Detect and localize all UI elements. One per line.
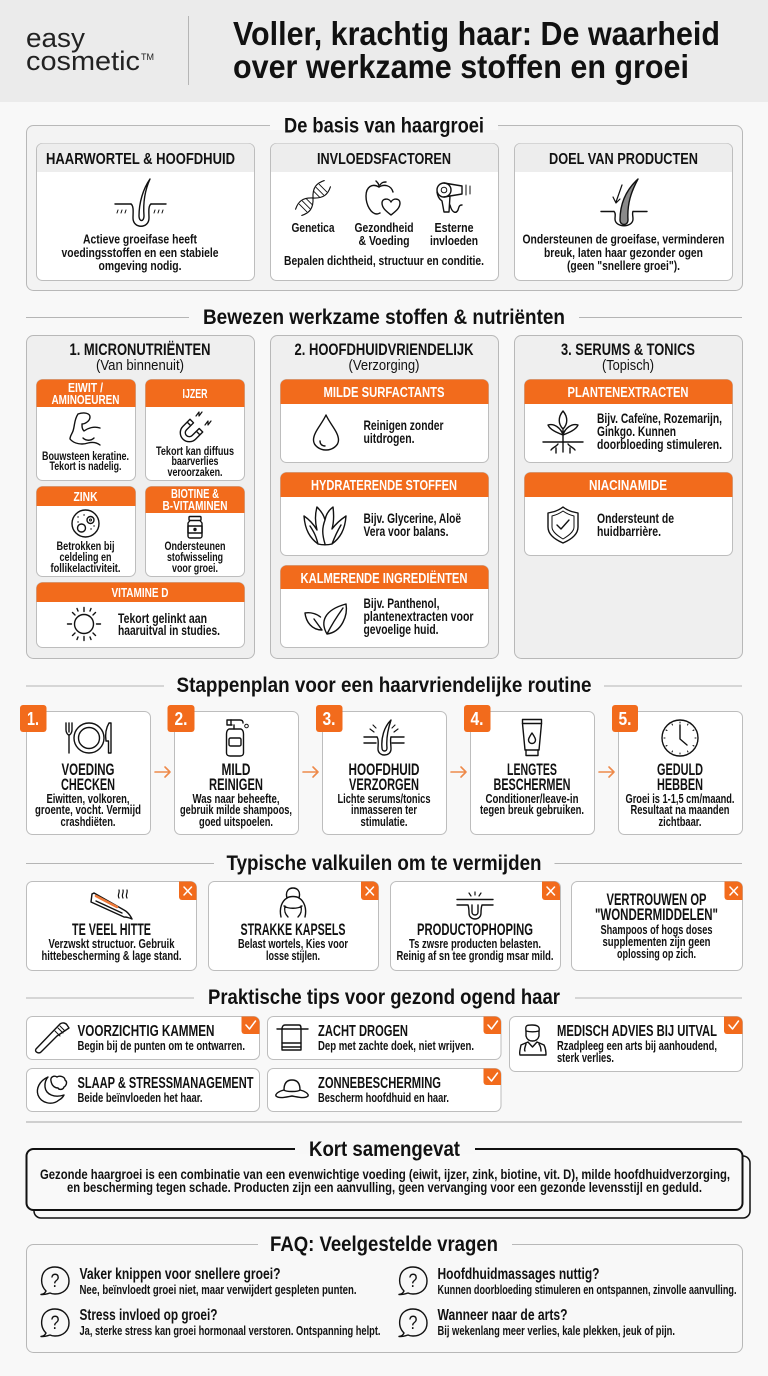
stap 1: voeding checken: 1. (27, 709, 39, 729)
stap 5: geduld hebben: HEBBEN (657, 776, 703, 794)
card: haarwortel en hoofdhuid: HAARWORTEL & HOOFDHUID (46, 151, 235, 168)
heading: stappenplan: Stappenplan voor een haarvriendelijke routine (176, 674, 592, 697)
valkuil: productophoping: PRODUCTOPHOPING (417, 921, 533, 939)
icon: strakke knot (280, 888, 306, 917)
stap 3: hoofdhuid verzorgen: VERZORGEN (349, 776, 419, 794)
valkuil: te veel hitte: hittebescherming & lage stand. (42, 948, 182, 963)
panel: faq (26, 1233, 742, 1352)
icon: potje (188, 516, 202, 538)
valkuil: strakke kapsels: losse stijlen. (266, 948, 320, 963)
valkuil: wondermiddelen: oplossing op zich. (617, 946, 696, 961)
arrow 4 (599, 767, 614, 777)
stap 4: lengtes beschermen: LENGTES (507, 761, 557, 779)
icon: aloe vera (304, 507, 346, 545)
panel: micronutrienten: (Van binnenuit) (96, 358, 184, 374)
faq item: wanneer naar de arts (399, 1307, 675, 1338)
stap 3: hoofdhuid verzorgen: inmasseren ter (351, 802, 417, 817)
icon: haarfollikel (115, 179, 166, 226)
stap 1: voeding checken: VOEDING (62, 761, 114, 779)
stap 2: mild reinigen: 2. (174, 709, 188, 729)
stap 4: lengtes beschermen (464, 705, 594, 834)
card: ijzer: Tekort kan diffuus (156, 444, 234, 458)
card: eiwit: Tekort is nadelig. (50, 459, 122, 473)
stap 4: lengtes beschermen: 4. (470, 709, 484, 729)
card: ijzer: veroorzaken. (168, 465, 222, 479)
card: eiwit: EIWIT / (68, 380, 103, 395)
stap 4: lengtes beschermen: BESCHERMEN (494, 776, 570, 794)
card: kalmerende ingredienten: KALMERENDE INGREDIËNTEN (300, 570, 468, 587)
card: niacinamide: NIACINAMIDE (589, 478, 667, 494)
card: hydraterende stoffen: Vera voor balans. (364, 523, 448, 539)
icon: kam (36, 1023, 69, 1053)
heading: faq: FAQ: Veelgestelde vragen (270, 1233, 498, 1256)
card: biotine: BIOTINE & (171, 486, 219, 501)
icon: tube (522, 720, 542, 756)
icon: zon (68, 608, 100, 640)
card: doel van producten: breuk, laten haar gezonder ogen (544, 245, 703, 260)
card: milde surfactants (280, 380, 488, 462)
card: niacinamide: huidbarrière. (597, 523, 661, 539)
card: biotine: Ondersteunen (164, 539, 226, 553)
card: haarwortel en hoofdhuid (36, 144, 254, 280)
logo (26, 23, 154, 76)
card: invloedsfactoren: Gezondheid (354, 220, 414, 235)
card: zink (36, 486, 136, 576)
card: plantenextracten: PLANTENEXTRACTEN (568, 385, 688, 401)
card: doel van producten: DOEL VAN PRODUCTEN (549, 151, 698, 168)
panel: hoofdhuidvriendelijk: (Verzorging) (348, 358, 420, 374)
panel: serums en tonics (514, 336, 742, 658)
stap 5: geduld hebben: zichtbaar. (658, 814, 702, 829)
valkuil: te veel hitte (26, 882, 196, 970)
card: hydraterende stoffen: HYDRATERENDE STOFFEN (311, 478, 457, 494)
card: biotine: stofwisseling (167, 550, 223, 564)
title (233, 15, 720, 85)
valkuil: strakke kapsels: STRAKKE KAPSELS (240, 921, 346, 939)
card: vitamine d: Tekort gelinkt aan (118, 610, 207, 626)
icon: handdoek (277, 1025, 308, 1050)
card: invloedsfactoren: INVLOEDSFACTOREN (317, 151, 451, 168)
valkuil: te veel hitte: TE VEEL HITTE (72, 921, 151, 939)
arrow 3 (451, 767, 466, 777)
card: milde surfactants: Reinigen zonder (364, 417, 444, 433)
icon: vraagteken (41, 1267, 69, 1295)
valkuil: wondermiddelen: "WONDERMIDDELEN" (595, 906, 718, 924)
card: eiwit: AMINOEUREN (52, 392, 120, 407)
card: invloedsfactoren: Bepalen dichtheid, structuur en conditie. (284, 253, 484, 268)
card: doel van producten: (geen "snellere groei"). (567, 258, 680, 273)
icon: klok (662, 720, 698, 756)
valkuil: productophoping: Reinig af sn tee grondig msar mild. (396, 948, 554, 963)
tip: zonnebescherming: Bescherm hoofdhuid en haar. (318, 1090, 449, 1105)
tip: zonnebescherming (268, 1068, 501, 1112)
icon: maan en wolk (37, 1076, 67, 1103)
card: invloedsfactoren: Genetica (292, 220, 335, 235)
stap 2: mild reinigen: MILD (222, 761, 251, 779)
tip: slaap en stressmanagement: Beide beïnvloeden het haar. (78, 1090, 202, 1105)
faq item: vaker knippen: Nee, beïnvloedt groei niet, maar verwijdert gespleten punten. (80, 1282, 356, 1297)
icon: vraagteken: ? (408, 1271, 418, 1292)
icon: vraagteken (41, 1309, 69, 1337)
card: biotine (146, 486, 244, 576)
stap 5: geduld hebben (612, 705, 742, 834)
card: kalmerende ingredienten: Bijv. Panthenol, (364, 595, 440, 611)
card: invloedsfactoren: invloeden (430, 233, 478, 248)
icon: bladeren (305, 604, 346, 634)
valkuil: wondermiddelen: VERTROUWEN OP (606, 891, 706, 909)
tip: medisch advies: sterk verlies. (557, 1050, 614, 1065)
card: biotine: voor groei. (172, 561, 218, 575)
header band (0, 0, 768, 102)
card: invloedsfactoren (270, 144, 498, 280)
tip: zacht drogen: ZACHT DROGEN (318, 1023, 408, 1040)
tip: zacht drogen: Dep met zachte doek, niet wrijven. (318, 1038, 474, 1053)
panel: kort samengevat (26, 1138, 750, 1218)
tip: zonnebescherming: ZONNEBESCHERMING (318, 1075, 441, 1092)
stap 5: geduld hebben: GEDULD (657, 761, 703, 779)
card: invloedsfactoren: & Voeding (358, 233, 410, 248)
tip: voorzichtig kammen: VOORZICHTIG KAMMEN (78, 1023, 214, 1040)
faq item: vaker knippen (41, 1266, 356, 1297)
icon: bord en bestek (66, 723, 111, 753)
icon: spier (70, 413, 100, 445)
faq item: wanneer naar de arts: Wanneer naar de arts? (438, 1307, 568, 1324)
panel: serums en tonics: 3. SERUMS & TONICS (561, 341, 695, 359)
icon: schild (548, 507, 578, 543)
card: ijzer (146, 380, 244, 480)
card: vitamine d: VITAMINE D (112, 585, 168, 600)
faq item: vaker knippen: Vaker knippen voor snellere groei? (80, 1266, 280, 1283)
panel: micronutrienten (26, 336, 254, 658)
valkuil: strakke kapsels (208, 882, 378, 970)
card: milde surfactants: uitdrogen. (364, 430, 414, 446)
stap 1: voeding checken (20, 705, 150, 834)
card: plantenextracten: Bijv. Cafeïne, Rozemarijn, (597, 410, 722, 426)
stap 3: hoofdhuid verzorgen: HOOFDHUID (348, 761, 420, 779)
icon: verstopte follikel (457, 892, 493, 919)
icon: fohn (437, 183, 470, 212)
icon: vraagteken: ? (50, 1271, 60, 1292)
stap 5: geduld hebben: 5. (618, 709, 632, 729)
icon: vraagteken: ? (408, 1313, 418, 1334)
stap 3: hoofdhuid verzorgen (316, 705, 446, 834)
icon: plant met wortels (543, 411, 583, 453)
icon: pompfles (226, 720, 248, 756)
valkuil: strakke kapsels: Belast wortels, Kies voor (238, 936, 348, 951)
icon: cel (72, 510, 99, 537)
valkuil: wondermiddelen: Shampoos of hogs doses (600, 922, 712, 937)
stap 3: hoofdhuid verzorgen: Lichte serums/tonics (338, 791, 430, 806)
icon: appel en hart (366, 181, 400, 215)
faq item: stress (41, 1307, 380, 1338)
card: hydraterende stoffen (280, 472, 488, 556)
card: eiwit (36, 380, 136, 480)
heading: praktische tips: Praktische tips voor gezond ogend haar (208, 986, 560, 1009)
tip: zacht drogen (268, 1016, 501, 1060)
icon: magneet (177, 412, 211, 445)
tip: medisch advies (510, 1016, 742, 1072)
card: eiwit: Bouwsteen keratine. (42, 449, 129, 463)
valkuil: wondermiddelen (572, 882, 742, 970)
card: ijzer: IJZER (182, 386, 208, 401)
stap 4: lengtes beschermen: Conditioner/leave-in (486, 791, 579, 806)
panel: serums en tonics: (Topisch) (602, 358, 654, 374)
arrow 1 (155, 767, 170, 777)
stap 2: mild reinigen: gebruik milde shampoos, (180, 802, 292, 817)
tip: voorzichtig kammen (26, 1016, 260, 1060)
faq item: stress: Stress invloed op groei? (80, 1307, 218, 1324)
stap 3: hoofdhuid verzorgen: 3. (322, 709, 336, 729)
tip: slaap en stressmanagement (26, 1068, 260, 1112)
stap 2: mild reinigen: Was naar beheefte, (192, 791, 280, 806)
stap 5: geduld hebben: Resultaat na maanden (630, 802, 730, 817)
card: vitamine d (36, 582, 244, 648)
card: vitamine d: haaruitval in studies. (118, 622, 220, 638)
stap 2: mild reinigen: goed uitspoelen. (199, 814, 273, 829)
icon: dna (294, 179, 332, 217)
card: kalmerende ingredienten: plantenextracten voor (364, 608, 474, 624)
faq item: wanneer naar de arts: Bij wekenlang meer verlies, kale plekken, jeuk of pijn. (438, 1323, 675, 1338)
stap 3: hoofdhuid verzorgen: stimulatie. (360, 814, 408, 829)
card: invloedsfactoren: Esterne (434, 220, 474, 235)
card: zink: celdeling en (60, 550, 112, 564)
faq item: hoofdhuidmassages: Hoofdhuidmassages nuttig? (438, 1266, 600, 1283)
card: zink: ZINK (74, 489, 98, 504)
icon: arts (520, 1025, 546, 1055)
card: plantenextracten: Ginkgo. Kunnen (597, 423, 676, 439)
card: milde surfactants: MILDE SURFACTANTS (324, 385, 445, 401)
card: haarwortel en hoofdhuid: Actieve groeifase heeft (83, 232, 198, 246)
card: niacinamide (524, 472, 732, 556)
stap 1: voeding checken: Eiwitten, volkoren, (46, 791, 130, 806)
stap 1: voeding checken: groente, vocht. Vermijd (35, 802, 141, 817)
panel: de basis van haargroei (26, 114, 742, 290)
valkuil: wondermiddelen: supplementen zijn geen (602, 934, 711, 949)
icon: druppel (314, 415, 338, 450)
card: plantenextracten (524, 380, 732, 462)
stap 1: voeding checken: CHECKEN (61, 776, 115, 794)
heading: typische valkuilen: Typische valkuilen om te vermijden (226, 852, 542, 875)
heading: de basis van haargroei: De basis van haargroei (284, 114, 484, 138)
card: doel van producten (514, 144, 732, 280)
card: ijzer: baarverlies (172, 454, 219, 468)
panel: hoofdhuidvriendelijk (270, 336, 498, 658)
tip: slaap en stressmanagement: SLAAP & STRESSMANAGEMENT (78, 1075, 254, 1092)
logo: easy (26, 23, 86, 53)
valkuil: te veel hitte: Verzwskt structuor. Gebruik (48, 936, 175, 951)
panel: hoofdhuidvriendelijk: 2. HOOFDHUIDVRIENDELIJK (294, 341, 474, 359)
faq item: stress: Ja, sterke stress kan groei hormonaal verstoren. Ontspanning helpt. (80, 1323, 380, 1338)
icon: follikel met pijl (601, 179, 647, 226)
icon: vraagteken: ? (50, 1313, 60, 1334)
card: kalmerende ingredienten (280, 566, 488, 648)
panel: micronutrienten: 1. MICRONUTRIËNTEN (70, 341, 210, 359)
card: niacinamide: Ondersteunt de (597, 510, 674, 526)
arrow 2 (303, 767, 318, 777)
card: hydraterende stoffen: Bijv. Glycerine, Aloë (364, 510, 461, 526)
logo: cosmetic (26, 46, 140, 76)
valkuil: productophoping (390, 882, 560, 970)
card: kalmerende ingredienten: gevoelige huid. (364, 621, 438, 637)
icon: vraagteken (399, 1267, 427, 1295)
heading: bewezen werkzame stoffen: Bewezen werkzame stoffen & nutriënten (203, 306, 565, 329)
card: haarwortel en hoofdhuid: omgeving nodig. (98, 258, 182, 273)
card: zink: Betrokken bij (56, 539, 114, 553)
stap 2: mild reinigen: REINIGEN (209, 776, 263, 794)
card: haarwortel en hoofdhuid: voedingsstoffen en een stabiele (62, 245, 218, 260)
text: samenvatting (40, 1166, 730, 1195)
icon: hoofdhuid (364, 720, 404, 755)
heading: kort samengevat: Kort samengevat (309, 1138, 460, 1161)
stap 2: mild reinigen (168, 705, 298, 834)
card: plantenextracten: doorbloeding stimuleren. (597, 436, 722, 452)
stap 1: voeding checken: crashdiëten. (60, 814, 116, 829)
icon: stijltang (91, 890, 132, 919)
tip: voorzichtig kammen: Begin bij de punten om te ontwarren. (78, 1038, 245, 1053)
card: zink: follikelactiviteit. (50, 561, 120, 575)
icon: zonnehoed (276, 1080, 308, 1098)
title: over werkzame stoffen en groei (233, 48, 689, 85)
icon: vraagteken (399, 1309, 427, 1337)
stap 4: lengtes beschermen: tegen breuk gebruiken. (480, 802, 584, 817)
valkuil: productophoping: Ts zwsre producten belasten. (409, 936, 541, 951)
title: Voller, krachtig haar: De waarheid (233, 15, 720, 52)
logo: TM (141, 52, 154, 62)
card: biotine: B-VITAMINEN (162, 498, 228, 513)
faq item: hoofdhuidmassages (399, 1266, 736, 1297)
